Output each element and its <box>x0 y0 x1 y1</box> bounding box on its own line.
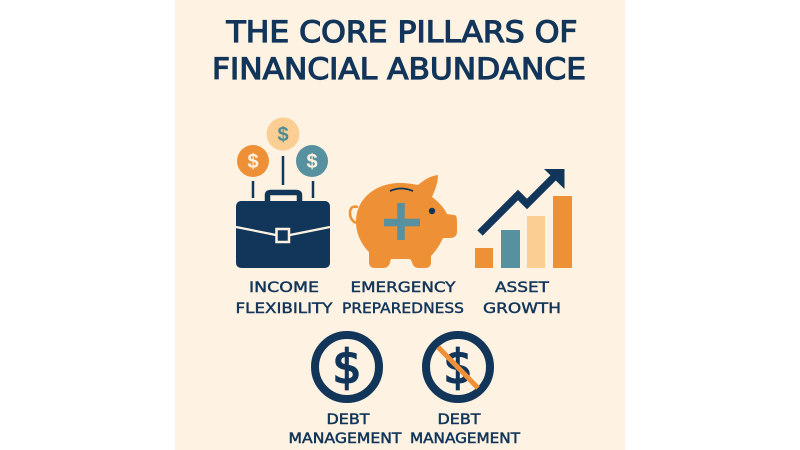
label: emergency preparedness: EMERGENCY <box>350 280 456 296</box>
label: debt management left: MANAGEMENT <box>288 431 402 447</box>
label: debt management right: MANAGEMENT <box>410 431 520 447</box>
icon: dollar in circle <box>315 335 379 399</box>
icon: growth bar chart with arrow <box>475 169 572 268</box>
label: emergency preparedness <box>342 280 464 317</box>
coin: teal <box>296 145 328 177</box>
label: debt management left <box>288 412 402 447</box>
icon: crossed-out dollar in circle <box>426 335 490 399</box>
coin: peach: $ <box>277 124 289 146</box>
icon: dollar in circle: $ <box>332 340 362 394</box>
icon: crossed-out dollar in circle: $ <box>443 340 473 394</box>
title: FINANCIAL ABUNDANCE <box>212 52 586 86</box>
label: income flexibility: INCOME <box>249 280 319 296</box>
label: asset growth: GROWTH <box>483 301 561 317</box>
coin: teal: $ <box>306 151 318 173</box>
coin: orange: $ <box>247 151 259 173</box>
label: asset growth: ASSET <box>495 280 549 296</box>
title: THE CORE PILLARS OF <box>225 15 578 49</box>
icon: briefcase with coins <box>236 118 330 268</box>
title <box>212 15 586 86</box>
label: emergency preparedness: PREPAREDNESS <box>342 301 464 317</box>
label: debt management right: DEBT <box>438 412 481 428</box>
panel: background <box>175 0 625 450</box>
label: debt management left: DEBT <box>326 412 370 428</box>
icon: piggy bank <box>350 175 457 268</box>
label: debt management right <box>410 412 520 447</box>
label: asset growth <box>483 280 561 317</box>
label: income flexibility: FLEXIBILITY <box>236 301 333 317</box>
coin: peach <box>266 118 300 150</box>
label: income flexibility <box>236 280 333 317</box>
coin: orange <box>237 145 269 177</box>
